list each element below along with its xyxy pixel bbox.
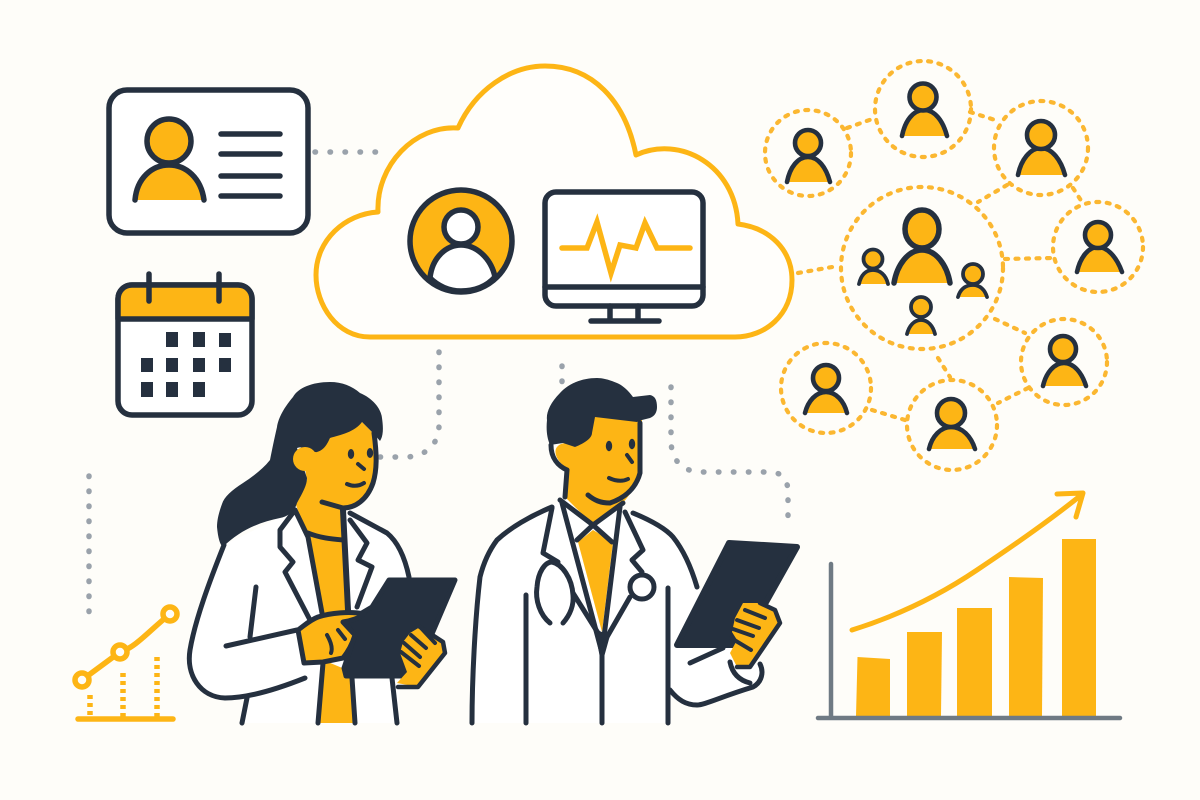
- ID card person: [135, 119, 204, 200]
- growth arrow: [852, 493, 1083, 630]
- face features: [322, 433, 376, 508]
- coat: [472, 497, 761, 723]
- collar and lapels: [543, 470, 643, 655]
- pointing hand: [298, 613, 364, 663]
- lapels and neckline: [280, 510, 372, 723]
- icon: calendar: [118, 274, 252, 415]
- coat outlines: [189, 513, 409, 723]
- bar chart with growth arrow: [818, 493, 1120, 718]
- hair: [547, 378, 657, 447]
- cloud: [316, 66, 792, 337]
- bars: [856, 539, 1096, 716]
- coat outlines: [472, 507, 762, 723]
- network person icons: [787, 84, 1122, 449]
- ear: [293, 447, 317, 471]
- male doctor: [472, 378, 797, 723]
- tie: [578, 530, 613, 632]
- dashed drop lines: [90, 657, 157, 719]
- grey dotted connectors: [89, 152, 788, 618]
- tablet: [677, 543, 797, 645]
- tablet: [344, 580, 455, 676]
- female doctor: [189, 382, 455, 723]
- hand on tablet: [730, 603, 780, 667]
- ear outline and face features: [551, 423, 640, 503]
- people network: [765, 61, 1143, 470]
- small line chart: [75, 607, 177, 719]
- face neck and ear: [555, 415, 642, 525]
- icon: ID card: [109, 90, 308, 233]
- calendar day squares: [141, 332, 231, 397]
- right hand on tablet: [397, 627, 445, 687]
- coat: [189, 510, 409, 723]
- blouse and neck: [296, 422, 376, 613]
- central group: [859, 210, 987, 334]
- cloud user avatar: [410, 190, 512, 292]
- network connectors and dotted circles: [765, 61, 1143, 470]
- heartbeat line: [562, 222, 690, 273]
- hair: [217, 382, 383, 547]
- stethoscope: [537, 562, 654, 623]
- monitor with heartbeat: [545, 192, 703, 321]
- trend line: [82, 614, 170, 680]
- ID card text lines: [221, 134, 280, 196]
- axes: [818, 564, 1120, 718]
